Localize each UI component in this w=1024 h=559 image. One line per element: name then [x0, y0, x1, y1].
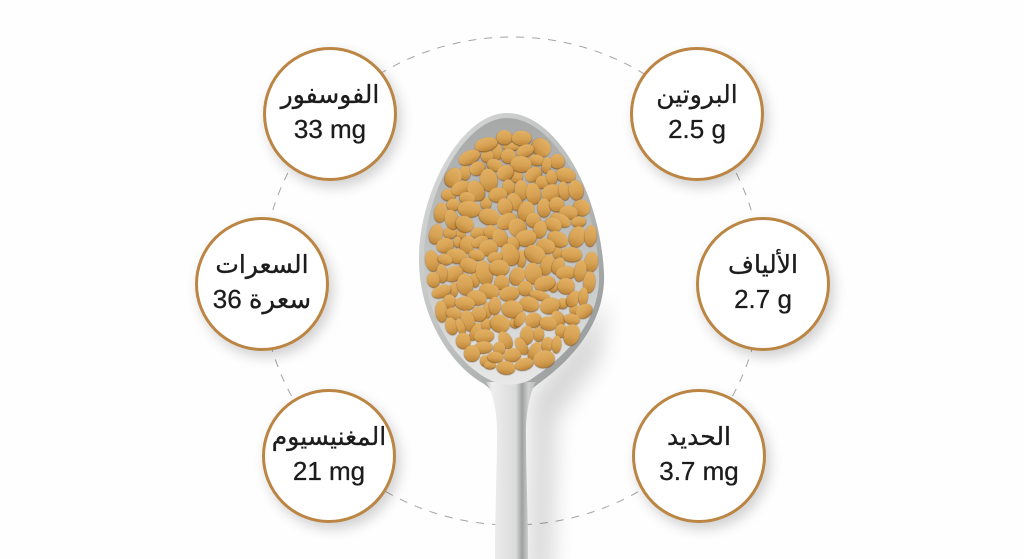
spoon handle — [486, 382, 536, 559]
nutrient: fiber: الألياف — [728, 250, 798, 279]
nutrient: magnesium — [262, 389, 396, 523]
nutrient: phosphorus — [263, 47, 397, 181]
nutrient: calories — [195, 217, 329, 351]
nutrient: calories: السعرات — [215, 250, 309, 279]
nutrient: magnesium: المغنيسيوم — [272, 422, 386, 451]
nutrient: phosphorus: 33 mg — [294, 114, 366, 144]
nutrient: calories: 36 سعرة — [213, 284, 311, 314]
nutrient: magnesium: 21 mg — [293, 456, 365, 486]
nutrient: iron: الحديد — [667, 422, 731, 451]
nutrient: iron: 3.7 mg — [659, 456, 739, 486]
spoon bowl — [419, 113, 604, 404]
nutrient: protein: 2.5 g — [668, 114, 726, 144]
nutrient: iron — [632, 389, 766, 523]
fenugreek seeds — [424, 131, 598, 374]
nutrient: protein: البروتين — [656, 80, 738, 109]
nutrient: fiber — [696, 217, 830, 351]
spoon bowl inner — [424, 118, 599, 384]
nutrient: phosphorus: الفوسفور — [281, 80, 379, 109]
spoon shadow — [528, 300, 606, 559]
nutrient: fiber: 2.7 g — [734, 284, 792, 314]
nutrient: protein — [630, 47, 764, 181]
dashed ring — [262, 37, 762, 525]
